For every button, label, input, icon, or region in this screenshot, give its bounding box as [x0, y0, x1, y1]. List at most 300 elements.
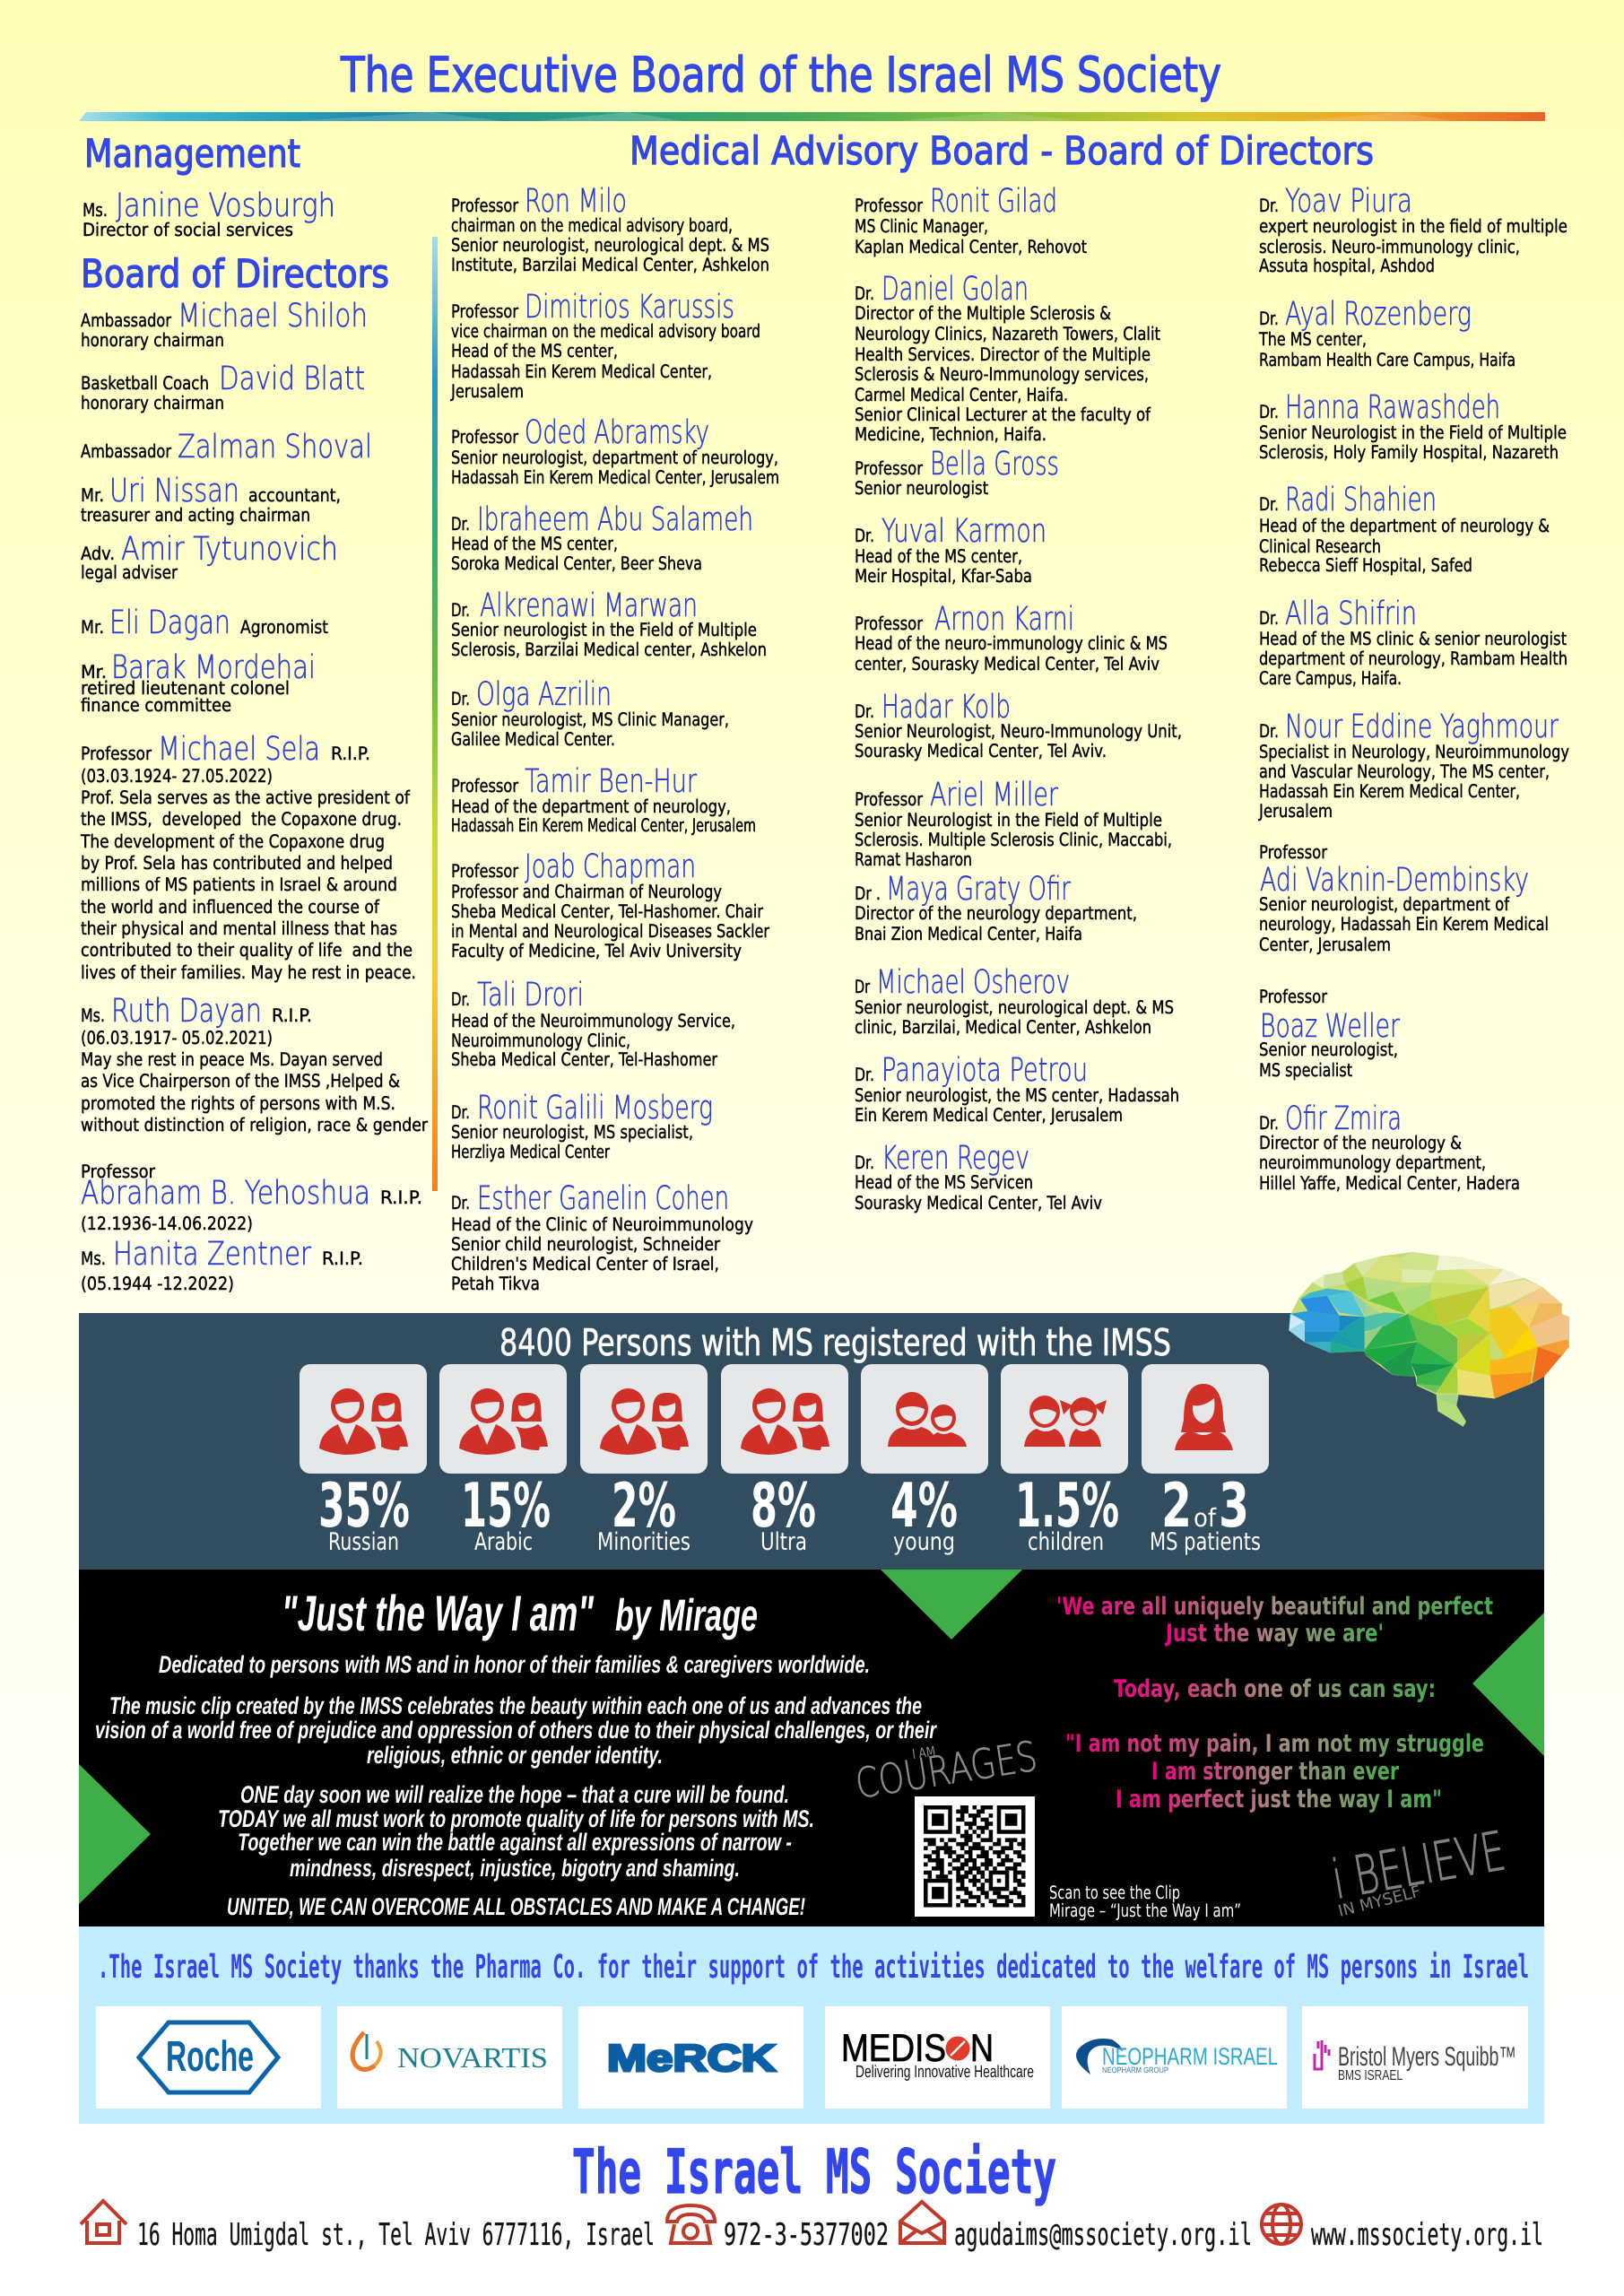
person: Daniel Golan: Daniel Golan: [881, 271, 1029, 308]
person: Michael Shiloh: honorary chairman: [81, 329, 224, 351]
person: Hanita Zentner: Ms.: [81, 1248, 106, 1269]
logo: Merck: [578, 2006, 803, 2109]
person: Maya Graty Ofir: Maya Graty Ofir: [886, 871, 1071, 908]
dedication text: vision of a world free of prejudice and oppression of others due to their physical challenges, or their: [95, 1717, 937, 1744]
person: Alla Shifrin: [1259, 596, 1568, 689]
scan caption: Mirage – “Just the Way I am”: [1049, 1900, 1241, 1921]
person: Michael Shiloh: Ambassador: [81, 309, 172, 331]
person: Yoav Piura: Assuta hospital, Ashdod: [1259, 255, 1435, 276]
person: Barak Mordehai: retired lieutenant colonel: [81, 677, 290, 699]
person: Daniel Golan: Director of the Multiple Sclerosis &: [855, 302, 1111, 324]
person: Ibraheem Abu Salameh: Dr.: [451, 513, 470, 535]
QR code: [915, 1796, 1035, 1917]
person: Janine Vosburgh: Director of social services: [83, 219, 293, 240]
person: Michael Sela: the world and influenced the course of: [81, 896, 380, 918]
person: Abraham B. Yehoshua: (12.1936-14.06.2022): [81, 1213, 253, 1234]
person: Ibraheem Abu Salameh: [451, 501, 753, 574]
person: Oded Abramsky: Oded Abramsky: [525, 414, 709, 451]
stat: 15% Arabic: [439, 1364, 567, 1556]
person: Yuval Karmon: [855, 513, 1046, 587]
person: Ruth Dayan: without distinction of religion, race & gender: [81, 1114, 429, 1135]
person: Tali Drori: Head of the Neuroimmunology Service,: [451, 1010, 735, 1031]
stat: 35% Russian: [300, 1364, 427, 1556]
person: Joab Chapman: Sheba Medical Center, Tel-Hashomer. Chair: [451, 900, 764, 922]
icon: low-poly brain: [1289, 1252, 1569, 1427]
person: Tamir Ben-Hur: Tamir Ben-Hur: [525, 763, 697, 800]
person: Nour Eddine Yaghmour: [1257, 709, 1569, 822]
person: Ruth Dayan: Ruth Dayan: [111, 993, 262, 1030]
person: Dimitrios Karussis: Head of the MS center,: [451, 340, 618, 361]
person: Yuval Karmon: Meir Hospital, Kfar-Saba: [855, 565, 1032, 587]
person: Ibraheem Abu Salameh: Head of the MS center,: [451, 533, 618, 554]
person: Daniel Golan: Dr.: [855, 283, 874, 304]
person: Ronit Gilad: Kaplan Medical Center, Rehovot: [855, 236, 1087, 257]
logo: Neopharm Israel: NEOPHARM GROUP: [1102, 2066, 1168, 2074]
scan caption: Scan to see the Clip: [1049, 1882, 1180, 1903]
person: Ofir Zmira: Dr.: [1259, 1112, 1279, 1134]
person: Olga Azrilin: [451, 676, 729, 750]
person: Ofir Zmira: [1259, 1100, 1520, 1194]
person: Ariel Miller: Senior Neurologist in the Field of Multiple: [855, 809, 1162, 831]
person: Adi Vaknin-Dembinsky: Adi Vaknin-Dembinsky: [1260, 862, 1529, 899]
person: Ariel Miller: Ramat Hasharon: [855, 848, 972, 870]
person: Arnon Karni: center, Sourasky Medical Center, Tel Aviv: [855, 653, 1159, 674]
stat: 35% Russian: Russian: [328, 1528, 399, 1556]
person: Michael Osherov: [855, 964, 1174, 1038]
person: Tali Drori: Dr.: [451, 988, 470, 1010]
person: Joab Chapman: in Mental and Neurological Diseases Sackler: [451, 920, 770, 942]
person: Abraham B. Yehoshua: Professor: [81, 1161, 156, 1182]
vertical rainbow divider: [432, 237, 438, 1191]
panel: statistics: [79, 1313, 1544, 1570]
person: Janine Vosburgh: Ms.: [83, 199, 108, 221]
person: Eli Dagan: [81, 604, 328, 641]
dedication text: mindness, disrespect, injustice, bigotry and shaming.: [290, 1855, 740, 1882]
lyrics quote: 'We are all uniquely beautiful and perfect: [1056, 1593, 1493, 1621]
person: Panayiota Petrou: [855, 1052, 1179, 1126]
stat: 15% Arabic: Arabic: [474, 1528, 533, 1556]
person: Hadar Kolb: Dr.: [855, 700, 874, 722]
panel: advisory column 3: [1257, 183, 1569, 1194]
person: Ayal Rozenberg: The MS center,: [1258, 328, 1367, 350]
person: Daniel Golan: Neurology Clinics, Nazareth Towers, Clalit: [855, 323, 1160, 344]
person: Barak Mordehai: [81, 649, 316, 716]
person: Ruth Dayan: R.I.P.: [272, 1004, 312, 1026]
person: Zalman Shoval: Ambassador: [81, 440, 172, 462]
stat: 2% Minorities: 2%: [612, 1471, 676, 1542]
person: Ronit Galili Mosberg: [451, 1090, 713, 1162]
person: Boaz Weller: Boaz Weller: [1260, 1008, 1400, 1045]
logo: Bristol Myers Squibb: Bristol Myers Squibb™: [1338, 2042, 1516, 2072]
person: Eli Dagan: Eli Dagan: [109, 604, 230, 641]
person: Hadar Kolb: Hadar Kolb: [881, 689, 1011, 726]
person: Dimitrios Karussis: Jerusalem: [449, 380, 524, 402]
person: Uri Nissan: Uri Nissan: [109, 473, 239, 509]
icon: phone: [667, 2205, 715, 2243]
person: Ronit Gilad: Professor: [855, 195, 924, 216]
person: Esther Ganelin Cohen: Senior child neurologist, Schneider: [451, 1233, 721, 1255]
person: Keren Regev: Keren Regev: [881, 1140, 1029, 1177]
logo: Novartis: NOVARTIS: [397, 2041, 548, 2074]
person: Michael Sela: the IMSS, developed the Copaxone drug.: [81, 808, 402, 830]
person: Abraham B. Yehoshua: Abraham B. Yehoshua: [81, 1175, 370, 1212]
panel: management and board of directors: [80, 132, 429, 1294]
person: David Blatt: David Blatt: [219, 361, 365, 397]
person: Ronit Gilad: [855, 183, 1087, 257]
person: Yoav Piura: Dr.: [1259, 195, 1279, 216]
person: Joab Chapman: Joab Chapman: [525, 848, 696, 885]
person: Olga Azrilin: Senior neurologist, MS Clinic Manager,: [451, 709, 729, 730]
stat: 2 of 3 MS patients: 2: [1161, 1471, 1192, 1542]
person: Michael Sela: Michael Sela: [158, 731, 320, 768]
person: Boaz Weller: [1259, 986, 1400, 1081]
panel: advisory column 2: [855, 183, 1182, 1213]
person: Dimitrios Karussis: Hadassah Ein Kerem Medical Center,: [451, 361, 712, 382]
person: Michael Sela: The development of the Copaxone drug: [80, 831, 385, 852]
person: Esther Ganelin Cohen: [451, 1180, 753, 1294]
person: Maya Graty Ofir: [855, 871, 1137, 944]
person: Oded Abramsky: Hadassah Ein Kerem Medical Center, Jerusalem: [451, 466, 779, 488]
person: Panayiota Petrou: Senior neurologist, the MS center, Hadassah: [855, 1084, 1179, 1106]
stat: 15% Arabic: 15%: [461, 1471, 551, 1542]
person: Bella Gross: Senior neurologist: [855, 477, 988, 499]
person: Hadar Kolb: Senior Neurologist, Neuro-Immunology Unit,: [855, 720, 1182, 742]
person: Michael Osherov: Senior neurologist, neurological dept. & MS: [855, 996, 1174, 1018]
heading: Medical Advisory Board: Medical Advisory Board - Board of Directors: [630, 129, 1374, 174]
person: Tali Drori: Tali Drori: [477, 977, 584, 1013]
person: Arnon Karni: [855, 601, 1168, 674]
logo: Medison: Delivering Innovative Healthcare: [855, 2063, 1034, 2082]
person: Michael Sela: Professor: [81, 743, 152, 764]
logo: Roche: [96, 2006, 321, 2109]
person: Joab Chapman: [451, 848, 770, 961]
stat: 4% young: 4%: [890, 1471, 958, 1542]
title: The Executive Board of the Israel MS Society: [340, 47, 1221, 103]
person: Ronit Galili Mosberg: Ronit Galili Mosberg: [477, 1090, 713, 1126]
person: Nour Eddine Yaghmour: Hadassah Ein Kerem Medical Center,: [1259, 780, 1520, 802]
person: Esther Ganelin Cohen: Dr.: [451, 1192, 470, 1213]
stats heading: 8400 Persons with MS registered with the IMSS: [499, 1321, 1171, 1364]
person: Ariel Miller: Sclerosis. Multiple Sclerosis Clinic, Maccabi,: [855, 829, 1172, 850]
person: Ruth Dayan: (06.03.1917- 05.02.2021): [81, 1027, 273, 1048]
stat: 1.5% children: children: [1028, 1528, 1104, 1556]
person: Eli Dagan: Mr.: [81, 616, 104, 638]
person: Ruth Dayan: [81, 993, 429, 1135]
decorative word: I believe in myself: IN MYSELF: [1336, 1883, 1422, 1921]
stat: 2 of 3 MS patients: 3: [1219, 1471, 1249, 1542]
person: Michael Sela: their physical and mental illness that has: [81, 918, 397, 939]
person: Ronit Galili Mosberg: Dr.: [451, 1101, 470, 1123]
address: 16 Homa Umigdal st., Tel Aviv 6777116, Israel: [137, 2217, 655, 2253]
person: Adi Vaknin-Dembinsky: Senior neurologist, department of: [1259, 893, 1510, 915]
person: Esther Ganelin Cohen: Petah Tikva: [451, 1273, 540, 1294]
person: Ariel Miller: [855, 777, 1172, 870]
heading: Board of Directors: Board of Directors: [81, 252, 389, 297]
person: Adi Vaknin-Dembinsky: [1259, 841, 1549, 955]
stat: 35% Russian: 35%: [318, 1471, 410, 1542]
person: Esther Ganelin Cohen: Head of the Clinic of Neuroimmunology: [451, 1213, 753, 1235]
green triangles: [79, 1570, 1544, 1904]
person: Michael Shiloh: Michael Shiloh: [178, 298, 368, 335]
person: Radi Shahien: Clinical Research: [1259, 535, 1381, 557]
person: Michael Osherov: Dr: [855, 976, 871, 997]
person: Oded Abramsky: [451, 414, 779, 488]
person: Zalman Shoval: [81, 429, 372, 465]
panel: advisory column 1: [449, 183, 779, 1294]
person: Oded Abramsky: Senior neurologist, department of neurology,: [451, 447, 778, 468]
person: Boaz Weller: Senior neurologist,: [1259, 1039, 1398, 1060]
person: Yoav Piura: expert neurologist in the field of multiple: [1259, 215, 1568, 237]
dedication text: The music clip created by the IMSS celebrates the beauty within each one of us and advances the: [109, 1692, 922, 1719]
person: Panayiota Petrou: Ein Kerem Medical Center, Jerusalem: [855, 1104, 1123, 1126]
person: Barak Mordehai: finance committee: [81, 694, 231, 716]
person: Daniel Golan: [855, 271, 1160, 445]
icon: house: [81, 2201, 126, 2243]
dedication text: [95, 1651, 937, 1920]
person: Michael Sela: [80, 731, 416, 983]
person: Ayal Rozenberg: [1258, 296, 1515, 370]
person: Ron Milo: Professor: [451, 195, 519, 216]
stat: 2 of 3 MS patients: of: [1194, 1503, 1217, 1533]
person: Hanna Rawashdeh: Dr.: [1259, 401, 1279, 422]
person: Panayiota Petrou: Panayiota Petrou: [881, 1052, 1088, 1089]
footer title: The Israel MS Society: [572, 2137, 1056, 2208]
person: Janine Vosburgh: [83, 187, 335, 240]
person: Ariel Miller: Ariel Miller: [930, 777, 1058, 813]
person: Daniel Golan: Medicine, Technion, Haifa.: [855, 423, 1046, 445]
person: Adi Vaknin-Dembinsky: Center, Jerusalem: [1259, 934, 1391, 955]
stat: 8% Ultra: [721, 1364, 848, 1556]
person: Alla Shifrin: Dr.: [1259, 607, 1279, 629]
person: Michael Sela: Prof. Sela serves as the active president of: [81, 787, 411, 808]
person: Ruth Dayan: promoted the rights of persons with M.S.: [81, 1092, 395, 1114]
person: Hanita Zentner: R.I.P.: [322, 1248, 363, 1269]
lyrics quote: Today, each one of us can say:: [1114, 1675, 1436, 1703]
person: Tamir Ben-Hur: [451, 763, 756, 836]
decorative word: I believe in myself: [1327, 1820, 1510, 1921]
person: Ayal Rozenberg: Ayal Rozenberg: [1285, 296, 1472, 333]
person: Ron Milo: Institute, Barzilai Medical Center, Ashkelon: [451, 254, 769, 275]
person: Maya Graty Ofir: Director of the neurology department,: [855, 902, 1137, 924]
person: Maya Graty Ofir: Bnai Zion Medical Center, Haifa: [855, 923, 1082, 944]
person: Bella Gross: Professor: [855, 457, 924, 479]
person: Barak Mordehai: Barak Mordehai: [111, 649, 316, 686]
person: Ofir Zmira: Director of the neurology &: [1259, 1132, 1462, 1153]
person: Arnon Karni: Head of the neuro-immunology clinic & MS: [855, 632, 1168, 654]
person: Amir Tytunovich: Amir Tytunovich: [121, 531, 338, 568]
person: Hadar Kolb: Sourasky Medical Center, Tel Aviv.: [855, 740, 1107, 761]
person: Hanna Rawashdeh: [1259, 389, 1567, 463]
person: Michael Sela: (03.03.1924- 27.05.2022): [81, 765, 273, 787]
decorative word: I am courages: COURAGES: [852, 1732, 1040, 1808]
person: Amir Tytunovich: Adv.: [81, 543, 115, 564]
person: David Blatt: Basketball Coach: [81, 372, 209, 394]
person: David Blatt: [81, 361, 365, 413]
person: Alla Shifrin: Care Campus, Haifa.: [1259, 667, 1402, 689]
stat: 2% Minorities: [580, 1364, 708, 1556]
dedication text: religious, ethnic or gender identity.: [367, 1742, 663, 1769]
person: Janine Vosburgh: Janine Vosburgh: [116, 187, 335, 224]
person: Michael Shiloh: [81, 298, 368, 351]
person: Radi Shahien: [1259, 482, 1550, 576]
person: Radi Shahien: Radi Shahien: [1285, 482, 1437, 518]
person: Joab Chapman: Professor: [451, 860, 519, 882]
person: Ronit Galili Mosberg: Senior neurologist, MS specialist,: [451, 1121, 693, 1143]
person: Ron Milo: Senior neurologist, neurological dept. & MS: [451, 234, 769, 256]
person: David Blatt: honorary chairman: [81, 392, 224, 413]
person: Michael Sela: R.I.P.: [331, 743, 370, 764]
person: Hanita Zentner: [81, 1236, 363, 1294]
lyrics quote: Just the way we are': [1164, 1620, 1384, 1648]
person: Panayiota Petrou: Dr.: [855, 1064, 874, 1085]
person: Barak Mordehai: Mr.: [81, 661, 107, 683]
person: Ayal Rozenberg: Rambam Health Care Campus, Haifa: [1259, 349, 1515, 370]
logo: Medison: N: [970, 2027, 994, 2070]
icon: globe: [1262, 2205, 1301, 2244]
person: Esther Ganelin Cohen: Esther Ganelin Cohen: [477, 1180, 729, 1217]
decorative word: I believe in myself: i BELIEVE: [1327, 1820, 1510, 1912]
person: Ruth Dayan: as Vice Chairperson of the IMSS ,Helped &: [81, 1070, 400, 1091]
person: Hanna Rawashdeh: Sclerosis, Holy Family Hospital, Nazareth: [1259, 441, 1559, 463]
person: Joab Chapman: Faculty of Medicine, Tel Aviv University: [451, 940, 742, 961]
stat: 8% Ultra: Ultra: [760, 1528, 807, 1556]
lyrics quote: I am perfect just the way I am": [1116, 1786, 1442, 1813]
logo: Bristol Myers Squibb: BMS ISRAEL: [1338, 2068, 1403, 2083]
person: Ron Milo: [451, 183, 769, 275]
person: Radi Shahien: Head of the department of neurology &: [1259, 515, 1550, 536]
dedication text: Dedicated to persons with MS and in honor of their families & caregivers worldwide.: [159, 1651, 870, 1678]
person: Hadar Kolb: [855, 689, 1182, 761]
person: Alkrenawi Marwan: Sclerosis, Barzilai Medical center, Ashkelon: [451, 639, 767, 660]
person: Dimitrios Karussis: [449, 289, 760, 402]
person: Ruth Dayan: May she rest in peace Ms. Dayan served: [81, 1048, 383, 1070]
logo: Bristol Myers Squibb: [1302, 2006, 1528, 2109]
stat: 2% Minorities: Minorities: [597, 1528, 690, 1556]
person: Alkrenawi Marwan: Senior neurologist in the Field of Multiple: [451, 619, 757, 640]
stat: 1.5% children: [1001, 1364, 1128, 1556]
person: Michael Sela: contributed to their quality of life and the: [81, 939, 413, 961]
person: Yuval Karmon: Dr.: [855, 525, 874, 546]
stat: 8% Ultra: 8%: [751, 1471, 816, 1542]
person: Tamir Ben-Hur: Hadassah Ein Kerem Medical Center, Jerusalem: [451, 814, 756, 836]
person: Esther Ganelin Cohen: Children's Medical Center of Israel,: [451, 1253, 719, 1274]
person: Ronit Galili Mosberg: Herzliya Medical Center: [451, 1141, 611, 1162]
person: Olga Azrilin: Galilee Medical Center.: [451, 728, 615, 750]
person: Ibraheem Abu Salameh: Soroka Medical Center, Beer Sheva: [451, 552, 702, 574]
person: Bella Gross: Bella Gross: [930, 446, 1059, 483]
stat: 4% young: young: [893, 1528, 955, 1556]
panel: Just the Way I am: [79, 1570, 1544, 1926]
person: Adi Vaknin-Dembinsky: neurology, Hadassah Ein Kerem Medical: [1259, 913, 1549, 935]
person: Boaz Weller: Professor: [1259, 986, 1328, 1007]
person: Dimitrios Karussis: Dimitrios Karussis: [525, 289, 734, 326]
person: Ruth Dayan: Ms.: [81, 1004, 105, 1026]
person: Tamir Ben-Hur: Professor: [451, 775, 519, 796]
panel: contact details: [81, 2201, 1543, 2253]
person: Yuval Karmon: Head of the MS center,: [855, 545, 1022, 567]
logo: Medison: MEDIS: [841, 2027, 946, 2070]
person: Tali Drori: [451, 977, 735, 1070]
person: Boaz Weller: MS specialist: [1259, 1059, 1352, 1081]
person: Hanna Rawashdeh: Hanna Rawashdeh: [1285, 389, 1500, 426]
person: Dimitrios Karussis: Professor: [451, 300, 519, 322]
stat: 4% young: [861, 1364, 988, 1556]
person: Ofir Zmira: neuroimmunology department,: [1259, 1152, 1486, 1173]
person: Amir Tytunovich: [81, 531, 338, 583]
person: Nour Eddine Yaghmour: Dr.: [1259, 720, 1279, 742]
person: Yoav Piura: Yoav Piura: [1285, 183, 1412, 220]
person: Michael Sela: by Prof. Sela has contributed and helped: [81, 852, 393, 874]
stat: 2 of 3 MS patients: [1142, 1364, 1269, 1556]
person: Ron Milo: chairman on the medical advisory board,: [451, 214, 733, 236]
person: Arnon Karni: Arnon Karni: [934, 601, 1074, 638]
person: Uri Nissan: accountant,: [248, 484, 341, 506]
logo: Roche: Roche: [166, 2033, 254, 2081]
person: Michael Sela: lives of their families. May he rest in peace.: [81, 961, 416, 983]
icon: envelope: [900, 2202, 944, 2243]
person: Arnon Karni: Professor: [855, 613, 924, 634]
person: Ronit Gilad: MS Clinic Manager,: [855, 215, 988, 237]
song title: "Just the Way I am": [282, 1585, 595, 1641]
person: Michael Osherov: clinic, Barzilai, Medical Center, Ashkelon: [855, 1016, 1151, 1038]
person: Ofir Zmira: Ofir Zmira: [1285, 1100, 1402, 1137]
person: Yoav Piura: sclerosis. Neuro-immunology clinic,: [1259, 236, 1520, 257]
person: Hanita Zentner: Hanita Zentner: [113, 1236, 311, 1273]
person: Keren Regev: [855, 1140, 1102, 1213]
person: Alkrenawi Marwan: [451, 587, 767, 660]
person: Radi Shahien: Rebecca Sieff Hospital, Safed: [1259, 554, 1472, 576]
person: Joab Chapman: Professor and Chairman of Neurology: [451, 881, 722, 902]
rainbow bar: [79, 112, 1545, 121]
person: Olga Azrilin: Dr.: [451, 688, 470, 709]
person: Alkrenawi Marwan: Dr.: [451, 599, 470, 621]
lyrics quote: [1056, 1593, 1493, 1813]
person: Keren Regev: Dr.: [855, 1152, 874, 1173]
person: Ofir Zmira: Hillel Yaffe, Medical Center, Hadera: [1259, 1172, 1520, 1194]
dedication text: UNITED, WE CAN OVERCOME ALL OBSTACLES AND MAKE A CHANGE!: [227, 1893, 805, 1920]
lyrics quote: I am stronger than ever: [1151, 1758, 1400, 1786]
person: Ayal Rozenberg: Dr.: [1259, 308, 1279, 329]
person: Michael Osherov: Michael Osherov: [876, 964, 1070, 1001]
person: Hanita Zentner: (05.1944 -12.2022): [81, 1273, 234, 1294]
person: Bella Gross: [855, 446, 1059, 499]
person: Nour Eddine Yaghmour: Jerusalem: [1257, 800, 1333, 822]
person: Yoav Piura: [1259, 183, 1568, 276]
person: Alkrenawi Marwan: Alkrenawi Marwan: [480, 587, 698, 624]
stat: 1.5% children: 1.5%: [1015, 1471, 1119, 1542]
logo: Neopharm Israel: NEOPHARM ISRAEL: [1102, 2043, 1278, 2070]
person: Daniel Golan: Carmel Medical Center, Haifa.: [855, 384, 1068, 405]
person: Dimitrios Karussis: vice chairman on the medical advisory board: [451, 320, 760, 342]
logo: Merck: MeRCK: [607, 2037, 776, 2079]
logo: Novartis: [337, 2006, 562, 2109]
person: Tali Drori: Sheba Medical Center, Tel-Hashomer: [451, 1048, 718, 1070]
heading: Management: Management: [84, 132, 300, 177]
person: Adi Vaknin-Dembinsky: Professor: [1259, 841, 1328, 863]
scan caption: [1049, 1882, 1241, 1921]
person: Alla Shifrin: Head of the MS clinic & senior neurologist: [1259, 628, 1567, 649]
person: Daniel Golan: Senior Clinical Lecturer at the faculty of: [855, 404, 1151, 425]
person: Olga Azrilin: Olga Azrilin: [476, 676, 612, 713]
person: Uri Nissan: [81, 473, 341, 526]
person: Maya Graty Ofir: Dr .: [855, 883, 881, 904]
person: Alla Shifrin: Alla Shifrin: [1285, 596, 1417, 632]
person: Ron Milo: Ron Milo: [525, 183, 627, 220]
person: Michael Sela: millions of MS patients in Israel & around: [81, 874, 397, 895]
person: Abraham B. Yehoshua: [81, 1161, 422, 1234]
person: Tamir Ben-Hur: Head of the department of neurology,: [451, 796, 731, 817]
phone number: 972-3-5377002: [724, 2217, 889, 2253]
